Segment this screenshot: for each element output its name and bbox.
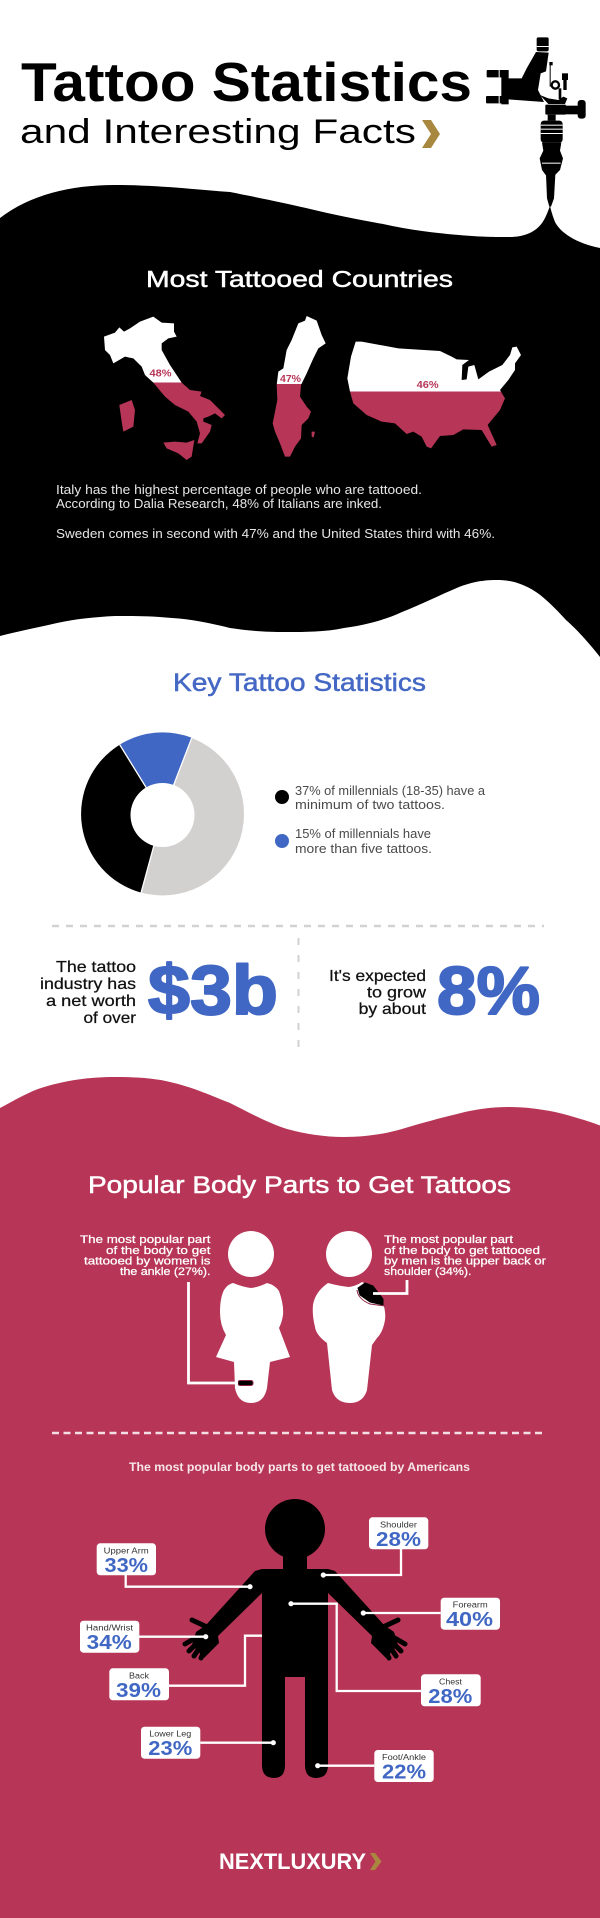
card: Chest: Chest: [439, 1677, 463, 1686]
card: Shoulder: [369, 1517, 428, 1551]
map: United States: [347, 342, 521, 448]
text block: country ranking: [56, 483, 495, 541]
stat: growth label: [329, 968, 427, 1018]
callout: men: [384, 1234, 546, 1278]
card: Hand/Wrist: 34%: [87, 1632, 132, 1654]
callout: men: shoulder (34%).: [384, 1266, 472, 1278]
card: Upper Arm: 33%: [104, 1555, 148, 1577]
stat: net worth label: [40, 959, 137, 1027]
text block: country ranking: Sweden comes in second with 47% and the United States third with 46%.: [56, 527, 495, 541]
chart legend: minimum of two tattoos.: [295, 798, 445, 812]
stat: growth label: to grow: [367, 984, 427, 1002]
map labels: [150, 368, 439, 391]
subheading: Americans: The most popular body parts to get tattooed by Americans: [129, 1462, 470, 1474]
card: Forearm: [441, 1598, 500, 1631]
donut chart: [81, 732, 244, 896]
card: Foot/Ankle: Foot/Ankle: [382, 1753, 427, 1762]
card: Forearm: 40%: [446, 1609, 493, 1631]
panel: red body parts section: [0, 1077, 600, 1918]
card: Upper Arm: Upper Arm: [104, 1546, 149, 1555]
callout: women: tattooed by women is: [84, 1256, 211, 1268]
chart legend: 37% of millennials (18-35) have a: [295, 784, 485, 798]
callout: men: by men is the upper back or: [384, 1256, 546, 1268]
card: Hand/Wrist: Hand/Wrist: [86, 1624, 134, 1633]
callout: women: of the body to get: [106, 1245, 210, 1257]
left arm and hand: [185, 1569, 263, 1658]
card: Chest: [421, 1674, 481, 1708]
icon: gold chevron: [422, 120, 440, 148]
callout: women: the ankle (27%).: [120, 1266, 210, 1278]
chart legend: 15% of millennials have: [295, 827, 431, 841]
panel: black countries section: [0, 185, 600, 657]
stat: net worth label: a net worth: [46, 993, 136, 1010]
card: Foot/Ankle: [374, 1750, 434, 1784]
card: Upper Arm: [97, 1543, 156, 1577]
card: Back: [109, 1668, 169, 1702]
card: Lower Leg: 23%: [148, 1738, 193, 1760]
title: [20, 51, 472, 151]
figure: man: [313, 1231, 407, 1403]
stat: growth label: by about: [359, 1001, 427, 1018]
card: Shoulder: 28%: [376, 1529, 421, 1551]
heading: Key Tattoo Statistics: Key Tattoo Statistics: [173, 669, 426, 697]
heading: Most Tattooed Countries: Most Tattooed Countries: [146, 266, 453, 292]
map labels: 46%: [417, 380, 439, 391]
stat: net worth label: of over: [84, 1010, 137, 1027]
heading: Popular Body Parts: Popular Body Parts to Get Tattoos: [88, 1172, 511, 1199]
map labels: 48%: [150, 368, 172, 380]
icon: logo chevron: [370, 1853, 382, 1870]
icon: tattoo machine: [486, 37, 586, 207]
text block: country ranking: Italy has the highest percentage of people who are tattooed.: [56, 483, 422, 497]
card: Foot/Ankle: 22%: [382, 1762, 426, 1784]
callout: women: [80, 1234, 211, 1278]
right arm and hand: [327, 1569, 405, 1658]
card: Hand/Wrist: [80, 1621, 139, 1654]
stat: $3b: $3b: [148, 951, 278, 1029]
connector lines: [126, 1549, 441, 1766]
card: Back: 39%: [116, 1680, 161, 1702]
card: Lower Leg: Lower Leg: [149, 1730, 191, 1739]
callout: women: The most popular part: [80, 1234, 210, 1246]
card: Forearm: Forearm: [453, 1601, 488, 1610]
card: Lower Leg: [141, 1727, 200, 1760]
stat: net worth label: industry has: [40, 976, 136, 993]
card: Back: Back: [129, 1671, 150, 1680]
callout: men: The most popular part: [384, 1234, 513, 1246]
stat: growth label: It's expected: [329, 968, 426, 985]
card: Shoulder: Shoulder: [380, 1520, 417, 1529]
figure: woman: [188, 1231, 290, 1403]
map labels: 47%: [280, 374, 301, 385]
stat: net worth label: The tattoo: [56, 959, 136, 976]
logo: NEXTLUXURY: NEXTLUXURY: [219, 1849, 366, 1874]
stat: 8%: 8%: [437, 953, 540, 1029]
card: Chest: 28%: [428, 1686, 473, 1708]
map: Sweden: [273, 316, 326, 457]
chart legend: more than five tattoos.: [295, 842, 432, 856]
title: Tattoo Statistics: [21, 51, 472, 113]
text block: country ranking: According to Dalia Research, 48% of Italians are inked.: [56, 497, 382, 511]
title: and Interesting Facts: [20, 113, 416, 151]
figure: black body silhouette: [185, 1499, 405, 1778]
callout: men: of the body to get tattooed: [384, 1245, 540, 1257]
map: Italy: [104, 317, 225, 460]
chart legend: [275, 784, 485, 856]
connector dots: [203, 1572, 366, 1768]
